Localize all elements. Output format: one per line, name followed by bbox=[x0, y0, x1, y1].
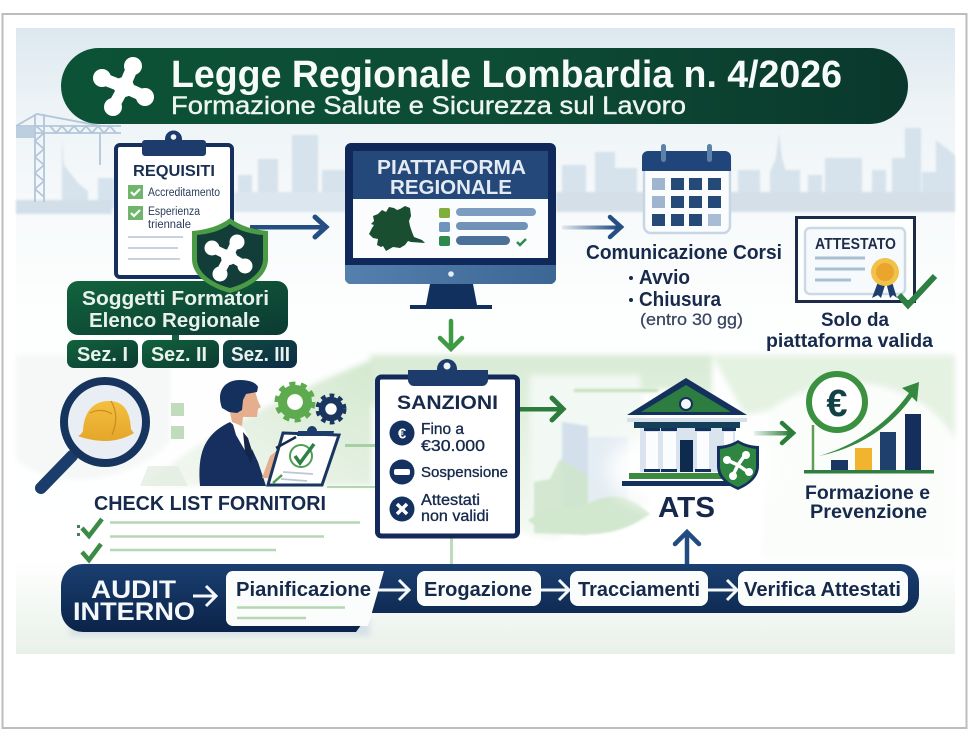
text: comunicazione corsi: Avvio bbox=[639, 267, 690, 289]
shield bbox=[717, 440, 759, 490]
panel: requisiti clipboard bbox=[116, 130, 232, 277]
text: solo da piattaforma valida bbox=[766, 310, 933, 352]
text: soggetti formatori elenco regionale: Soggetti Formatori bbox=[82, 287, 269, 310]
icon: check bbox=[899, 276, 935, 305]
arrow: to tracciamenti bbox=[541, 580, 569, 600]
arrow: audit up to ATS bbox=[675, 532, 699, 566]
roof bbox=[627, 378, 747, 415]
check list fornitori lines bbox=[77, 519, 360, 560]
check: accreditamento bbox=[128, 185, 220, 199]
clipboard bbox=[268, 433, 339, 485]
text: solo da piattaforma valida: piattaforma valida bbox=[766, 331, 933, 352]
text: audit interno: INTERNO bbox=[73, 598, 195, 626]
bar shadow bbox=[70, 620, 370, 636]
heading: sanzioni: SANZIONI bbox=[397, 393, 498, 414]
subtitle: Formazione Salute e Sicurezza sul Lavoro bbox=[171, 92, 686, 120]
heading: requisiti: REQUISITI bbox=[133, 163, 215, 180]
map of Lombardy bbox=[369, 206, 425, 251]
man head bbox=[229, 391, 261, 426]
heading: piattaforma regionale bbox=[377, 156, 526, 199]
arrow: requisiti to piattaforma bbox=[250, 217, 326, 237]
base bbox=[629, 473, 729, 479]
monitor body bbox=[345, 143, 556, 284]
step: tracciamenti: Tracciamenti bbox=[578, 579, 700, 601]
text: comunicazione corsi: (entro 30 gg) bbox=[640, 311, 743, 329]
text: soggetti formatori elenco regionale bbox=[82, 287, 269, 332]
man arm bbox=[262, 449, 285, 478]
euro coin: € bbox=[826, 383, 848, 425]
door bbox=[680, 440, 693, 472]
text: comunicazione corsi: Chiusura bbox=[639, 289, 722, 311]
check: esperienza triennale: Esperienza bbox=[148, 206, 201, 218]
crane bbox=[16, 114, 121, 202]
icon: calendar bbox=[642, 144, 731, 233]
sezione I: Sez. I bbox=[77, 344, 128, 366]
icon: ATS building bbox=[608, 378, 772, 512]
monitor stand bbox=[410, 284, 492, 309]
arrow: piattaforma down to sanzioni bbox=[440, 321, 462, 349]
text: comunicazione corsi: Comunicazione Corsi bbox=[586, 242, 782, 264]
sanction: attestati non validi: Attestati bbox=[421, 492, 480, 509]
background buildings near ATS bbox=[528, 389, 658, 535]
chart: growth with euro bbox=[804, 374, 934, 474]
banner pill bbox=[61, 48, 908, 124]
clipboard board bbox=[116, 145, 232, 277]
text: formazione e prevenzione: Prevenzione bbox=[810, 502, 927, 523]
sezione II: Sez. II bbox=[151, 344, 207, 366]
header banner bbox=[61, 48, 908, 124]
text: audit interno: AUDIT bbox=[91, 576, 176, 604]
gear green bbox=[277, 384, 313, 420]
sanction: sospensione bbox=[390, 460, 508, 484]
gear navy bbox=[318, 396, 344, 422]
bar body bbox=[61, 564, 919, 632]
panel: attestato certificate bbox=[796, 218, 935, 305]
monitor header band bbox=[353, 151, 548, 199]
connector lines to sanzioni bbox=[327, 444, 453, 564]
check: esperienza triennale bbox=[128, 206, 201, 231]
sanction: attestati non validi: non validi bbox=[421, 508, 489, 525]
panel: audit interno process bar bbox=[61, 564, 919, 636]
green background shapes lower section bbox=[16, 355, 955, 560]
heading: check list fornitori: CHECK LIST FORNITORI bbox=[94, 493, 326, 515]
step: pianificazione bbox=[226, 571, 384, 626]
monitor screen bbox=[353, 199, 548, 258]
panel: soggetti formatori bbox=[67, 281, 297, 368]
arrow: sanzioni to ATS bbox=[520, 398, 563, 420]
sanction: fino a 30000: € bbox=[398, 426, 407, 442]
icon: small background checklist bbox=[140, 403, 188, 486]
panel: piattaforma regionale monitor bbox=[345, 143, 556, 309]
axes bbox=[812, 425, 814, 471]
clipboard clip bbox=[142, 130, 206, 156]
bars bbox=[831, 460, 848, 470]
label: ATS: ATS bbox=[658, 492, 715, 524]
heading: piattaforma regionale: REGIONALE bbox=[390, 176, 512, 199]
clipboard board bbox=[378, 377, 518, 536]
status list bbox=[439, 208, 536, 246]
text: audit interno bbox=[73, 576, 195, 626]
step: tracciamenti bbox=[570, 571, 708, 606]
text: comunicazione corsi bbox=[586, 242, 782, 329]
text: formazione e prevenzione bbox=[805, 483, 930, 523]
arrow: ATS to formazione bbox=[754, 423, 793, 443]
illustration: man with clipboard and gears bbox=[199, 380, 344, 486]
icon: Lombardy rose logo bbox=[93, 57, 154, 116]
icon: shield with logo bbox=[192, 218, 268, 293]
check: esperienza triennale: triennale bbox=[148, 219, 191, 231]
clipboard clip bbox=[408, 359, 488, 386]
sezione III bbox=[223, 340, 297, 368]
growth arrow bbox=[819, 382, 919, 456]
sezione II bbox=[142, 340, 219, 368]
step: erogazione bbox=[417, 571, 541, 606]
sezione III: Sez. III bbox=[231, 344, 290, 366]
step: erogazione: Erogazione bbox=[424, 579, 532, 601]
box: elenco regionale bbox=[67, 281, 288, 335]
icon: magnifying glass with helmet bbox=[41, 381, 146, 488]
step: verifica attestati: Verifica Attestati bbox=[744, 579, 901, 601]
panel: sanzioni clipboard bbox=[378, 359, 518, 536]
sanction: fino a 30000 bbox=[390, 420, 485, 455]
sanction: fino a 30000: €30.000 bbox=[421, 438, 485, 455]
icon: ribbon seal bbox=[871, 258, 899, 298]
text: soggetti formatori elenco regionale: Elenco Regionale bbox=[89, 309, 260, 332]
city skyline background bbox=[16, 128, 955, 214]
step: verifica attestati bbox=[738, 571, 908, 606]
title: Legge Regionale Lombardia n. 4/2026 bbox=[171, 54, 842, 96]
man suit bbox=[199, 422, 266, 486]
text: formazione e prevenzione: Formazione e bbox=[805, 483, 930, 504]
sanction: attestati non validi bbox=[390, 492, 489, 525]
arrow: to verifica attestati bbox=[708, 580, 737, 600]
arrow: piattaforma to comunicazione bbox=[562, 217, 621, 237]
sanction: sospensione: Sospensione bbox=[421, 464, 508, 481]
panel: attestato certificate: ATTESTATO bbox=[815, 236, 896, 253]
helmet bbox=[78, 401, 134, 441]
columns bbox=[646, 432, 733, 470]
arrow: to erogazione bbox=[378, 580, 409, 600]
text: solo da piattaforma valida: Solo da bbox=[821, 310, 889, 331]
sezione I bbox=[67, 340, 138, 368]
sanction: fino a 30000: Fino a bbox=[421, 421, 464, 438]
step: pianificazione: Pianificazione bbox=[236, 579, 371, 601]
heading: piattaforma regionale: PIATTAFORMA bbox=[377, 156, 526, 179]
check: accreditamento: Accreditamento bbox=[148, 187, 220, 199]
arrow: to pianificazione bbox=[193, 586, 216, 606]
